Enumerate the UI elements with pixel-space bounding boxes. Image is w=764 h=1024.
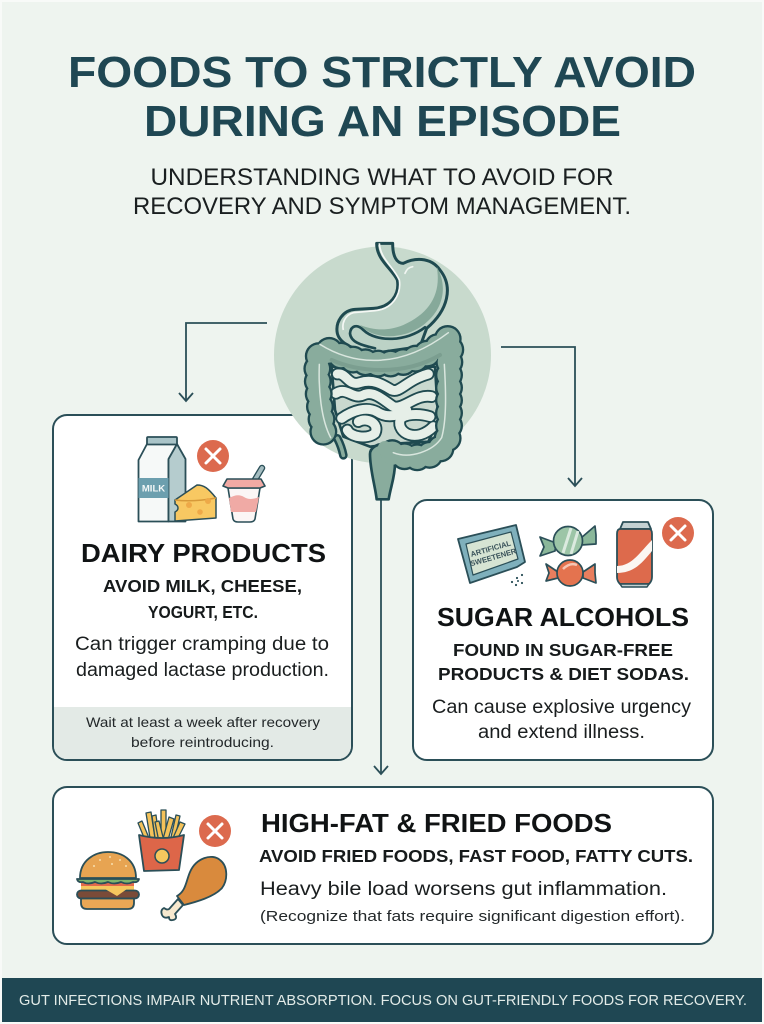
description: sugar alcohols: Can cause explosive urgency [432,697,692,718]
icon: artificial sweetener packet: ARTIFICIAL [469,538,512,559]
panel: sugar alcohols [413,500,713,760]
title [68,48,696,146]
icon: prohibited badge [199,815,231,847]
title: FOODS TO STRICTLY AVOID [68,48,696,97]
note: reintroducing dairy: Wait at least a week after recovery [86,714,320,730]
icon: yogurt cup [223,468,265,522]
icon: prohibited badge [197,440,229,472]
subtitle [133,164,631,220]
icon: artificial sweetener packet [458,525,525,586]
icon: soda can [617,522,652,587]
note: reintroducing dairy: before reintroducing. [131,734,274,750]
description: sugar alcohols: and extend illness. [478,722,645,743]
stomach [337,243,447,353]
heading: dairy products: DAIRY PRODUCTS [81,538,326,568]
description: sugar alcohols [432,697,692,743]
icon: french fries [138,810,185,871]
icon: digestive system [317,243,450,499]
instruction: dairy: AVOID MILK, CHEESE, [103,576,302,596]
large intestine [317,333,450,499]
instruction: sugar alcohols: PRODUCTS & DIET SODAS. [438,664,689,684]
subtitle: UNDERSTANDING WHAT TO AVOID FOR [150,164,614,191]
arrow: to high-fat foods [374,500,388,774]
icon: green candy [540,526,596,556]
small intestine [332,367,438,447]
heading: sugar alcohols: SUGAR ALCOHOLS [437,602,689,632]
instruction: sugar alcohols [438,640,689,684]
description: dairy: damaged lactase production. [76,660,329,681]
arrow: to dairy products [179,323,267,401]
note: reintroducing dairy [86,714,320,750]
icon: artificial sweetener packet: SWEETENER [469,546,518,568]
icon: fried chicken drumstick [161,857,226,920]
title: DURING AN EPISODE [144,97,621,146]
backdrop circle [274,246,491,464]
heading: high-fat and fried foods: HIGH-FAT & FRIED FOODS [261,808,612,838]
note: digestion effort: (Recognize that fats require significant digestion effort). [260,908,685,925]
instruction: sugar alcohols: FOUND IN SUGAR-FREE [453,640,673,660]
icon: prohibited badge [662,517,694,549]
panel: high-fat and fried foods [53,787,713,944]
appendix [337,438,343,455]
arrow: to sugar alcohols [501,347,582,486]
instruction: dairy: YOGURT, ETC. [148,602,258,622]
icon: cheese wedge [175,485,216,521]
icon: milk carton [138,437,186,522]
footer banner: GUT INFECTIONS IMPAIR NUTRIENT ABSORPTION. FOCUS ON GUT-FRIENDLY FOODS FOR RECOVERY. [19,993,747,1009]
description: dairy [75,634,329,681]
icon: burger [77,852,139,909]
subtitle: RECOVERY AND SYMPTOM MANAGEMENT. [133,193,631,220]
description: dairy: Can trigger cramping due to [75,634,329,655]
panel: dairy products [53,415,352,760]
icon: milk carton: MILK [142,484,165,494]
description: fried foods: Heavy bile load worsens gut inflammation. [260,879,667,900]
icon: orange candy [546,560,596,586]
footer banner [2,978,762,1022]
instruction: fried foods: AVOID FRIED FOODS, FAST FOOD, FATTY CUTS. [259,846,693,866]
instruction: dairy [103,576,302,622]
